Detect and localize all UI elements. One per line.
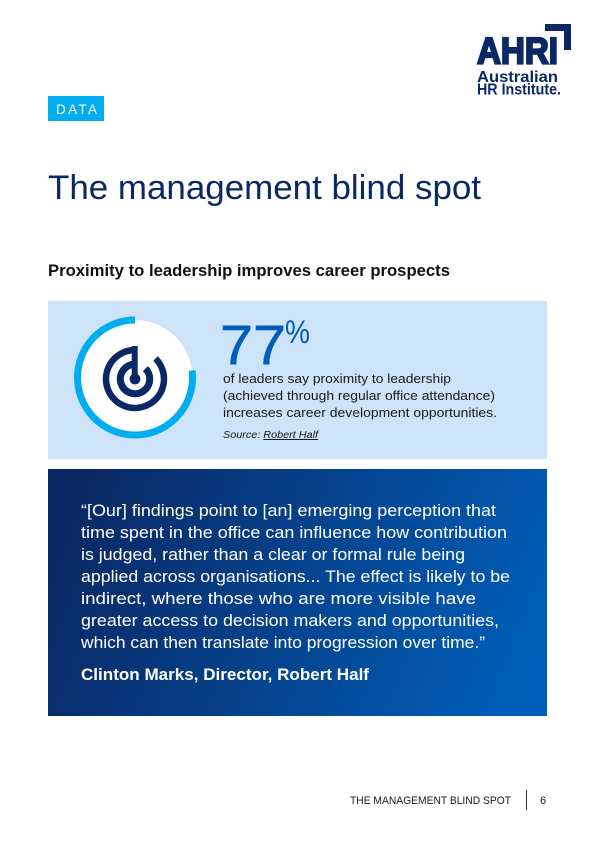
icon: radar target <box>106 346 164 408</box>
quote text: “[Our] findings point to [an] emerging perception that <box>81 501 496 520</box>
statistic description: (achieved through regular office attendance) <box>223 388 495 403</box>
panel: statistic <box>48 301 547 459</box>
statistic: 77%: 77 <box>220 313 286 376</box>
footer: THE MANAGEMENT BLIND SPOT <box>350 795 512 807</box>
statistic description: increases career development opportunities. <box>223 405 497 420</box>
statistic description: of leaders say proximity to leadership <box>223 371 451 386</box>
quote text: indirect, where those who are more visible have <box>81 589 476 608</box>
logo: AHRI <box>477 24 571 98</box>
quote text <box>80 501 510 652</box>
footer <box>350 790 546 810</box>
tag: DATA: DATA <box>56 102 97 117</box>
quote text: time spent in the office can influence how contribution <box>81 523 507 542</box>
statistic description <box>223 371 497 420</box>
tag: DATA <box>48 96 104 121</box>
quote text: which can then translate into progression over time.” <box>80 633 485 652</box>
logo: AHRI: Australian <box>477 69 558 86</box>
donut chart: 77 percent <box>78 320 193 435</box>
quote text: applied across organisations... The effect is likely to be <box>81 567 510 586</box>
panel: quote <box>48 469 547 716</box>
footer: 6 <box>540 795 546 807</box>
statistic: 77%: % <box>285 314 310 350</box>
statistic: 77% <box>220 313 310 376</box>
section heading: Proximity to leadership improves career prospects <box>48 262 450 280</box>
quote text: is judged, rather than a clear or formal rule being <box>81 545 465 564</box>
quote attribution: Clinton Marks, Director, Robert Half <box>81 665 369 684</box>
logo: AHRI: AHRI <box>477 30 558 72</box>
source: Source: Robert Half <box>223 430 319 441</box>
quote text: greater access to decision makers and opportunities, <box>81 611 499 630</box>
logo: AHRI: HR Institute. <box>477 82 561 98</box>
title: The management blind spot <box>48 169 482 207</box>
